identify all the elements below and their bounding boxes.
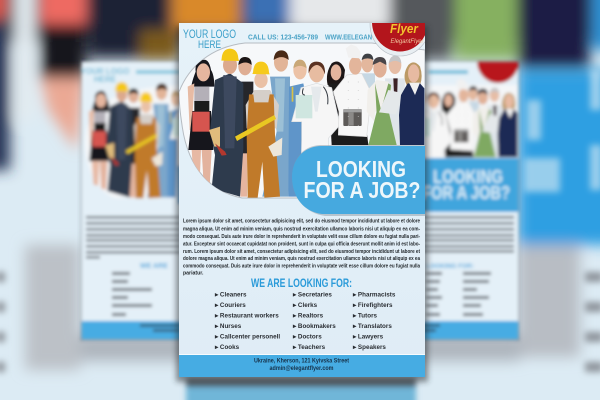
job list column 3: ▸ Pharmacists [352, 292, 396, 298]
job list column 2: ▸ Doctors [292, 333, 322, 340]
left back flyer: WE ARE [140, 263, 168, 270]
flyer paper [179, 23, 425, 377]
job list column 1: ▸ Cooks [214, 344, 240, 351]
right back flyer: LOOKING FOR: [426, 263, 474, 270]
flyer badge: ElegantFlyer [390, 39, 424, 45]
job list column 1: ▸ Couriers [214, 302, 246, 309]
footer band: admin@elegantflyer.com [270, 365, 334, 372]
logo placeholder: YOUR LOGO [183, 27, 236, 41]
job list column 1: ▸ Callcenter personell [214, 333, 280, 340]
left back flyer: HERE [94, 75, 117, 84]
blurred reflection under main flyer [186, 378, 416, 400]
job list column 3: ▸ Translators [352, 323, 392, 330]
photo: group of workers [188, 44, 424, 198]
right back flyer: FOR A JOB? [422, 183, 510, 203]
job list column 1: ▸ Nurses [214, 323, 242, 330]
body paragraph [183, 219, 420, 277]
job list column 3: ▸ Tutors [352, 312, 378, 319]
flyer badge: Flyer [390, 21, 419, 36]
phone number: CALL US: 123-456-789 [248, 32, 318, 42]
website: WWW.EELEGAN [325, 32, 372, 42]
job list column 3: ▸ Firefighters [352, 302, 393, 309]
logo placeholder [183, 30, 236, 48]
job list column 3 [352, 292, 396, 351]
headline panel: LOOKING [316, 156, 406, 182]
job list column 2: ▸ Realtors [292, 312, 324, 319]
flyer badge [370, 23, 425, 56]
job list column 1: ▸ Cleaners [214, 292, 247, 298]
job list column 1: ▸ Restaurant workers [214, 312, 279, 319]
body paragraph: pariatur. [183, 271, 204, 277]
job list column 2 [292, 292, 336, 351]
job list column 3: ▸ Lawyers [352, 333, 384, 340]
body paragraph: dolore magna aliqua. Ut enim ad minim veniam, quis nostrud exercitation ullamco laboris nisi ut aliquip ex ea [183, 256, 420, 262]
logo placeholder: HERE [198, 39, 221, 51]
job list column 2: ▸ Bookmakers [292, 323, 336, 330]
right back flyer [425, 58, 522, 342]
job list column 3: ▸ Speakers [352, 344, 386, 351]
body paragraph: Lorem ipsum dolor sit amet, consectetur adipisicing elit, sed do eiusmod tempor incididunt ut labore et dolore [183, 219, 420, 225]
section heading: WE ARE LOOKING FOR: [251, 276, 352, 290]
footer band: Ukraine, Kherson, 121 Kyivska Street [254, 358, 350, 364]
footer band [179, 354, 425, 378]
left back flyer: YOUR LOGO [81, 67, 129, 76]
photo backdrop [179, 43, 425, 198]
body paragraph: rum. Lorem ipsum dolor sit amet, consectetur adipisicing elit, sed do eiusmod tempor incididunt ut labore et [183, 249, 420, 255]
headline panel: FOR A JOB? [304, 177, 420, 203]
body paragraph: modo consequat. Duis aute irure dolor in reprehenderit in voluptate velit esse cillum dolore eu fugiat nulla pari- [183, 234, 420, 240]
headline panel [292, 145, 425, 216]
left back flyer [80, 60, 273, 341]
job list column 1 [214, 292, 280, 351]
body paragraph: commodo consequat. Duis aute irure dolor in reprehenderit in voluptate velit esse cillum dolore eu fugiat nulla [183, 263, 420, 269]
body paragraph: atur. Excepteur sint occaecat cupidatat non proident, sunt in culpa qui officia deserunt mollit anim id est labo- [183, 242, 420, 248]
job list column 2: ▸ Clerks [292, 302, 318, 309]
job list column 2: ▸ Secretaries [292, 292, 332, 298]
right back flyer: LOOKING [433, 167, 503, 187]
job list column 2: ▸ Teachers [292, 344, 326, 351]
main flyer [179, 0, 430, 378]
body paragraph: magna aliqua. Ut enim ad minim veniam, quis nostrud exercitation ullamco laboris nisi ut aliquip ex ea com- [183, 226, 420, 232]
main flyer shadow [176, 26, 428, 382]
